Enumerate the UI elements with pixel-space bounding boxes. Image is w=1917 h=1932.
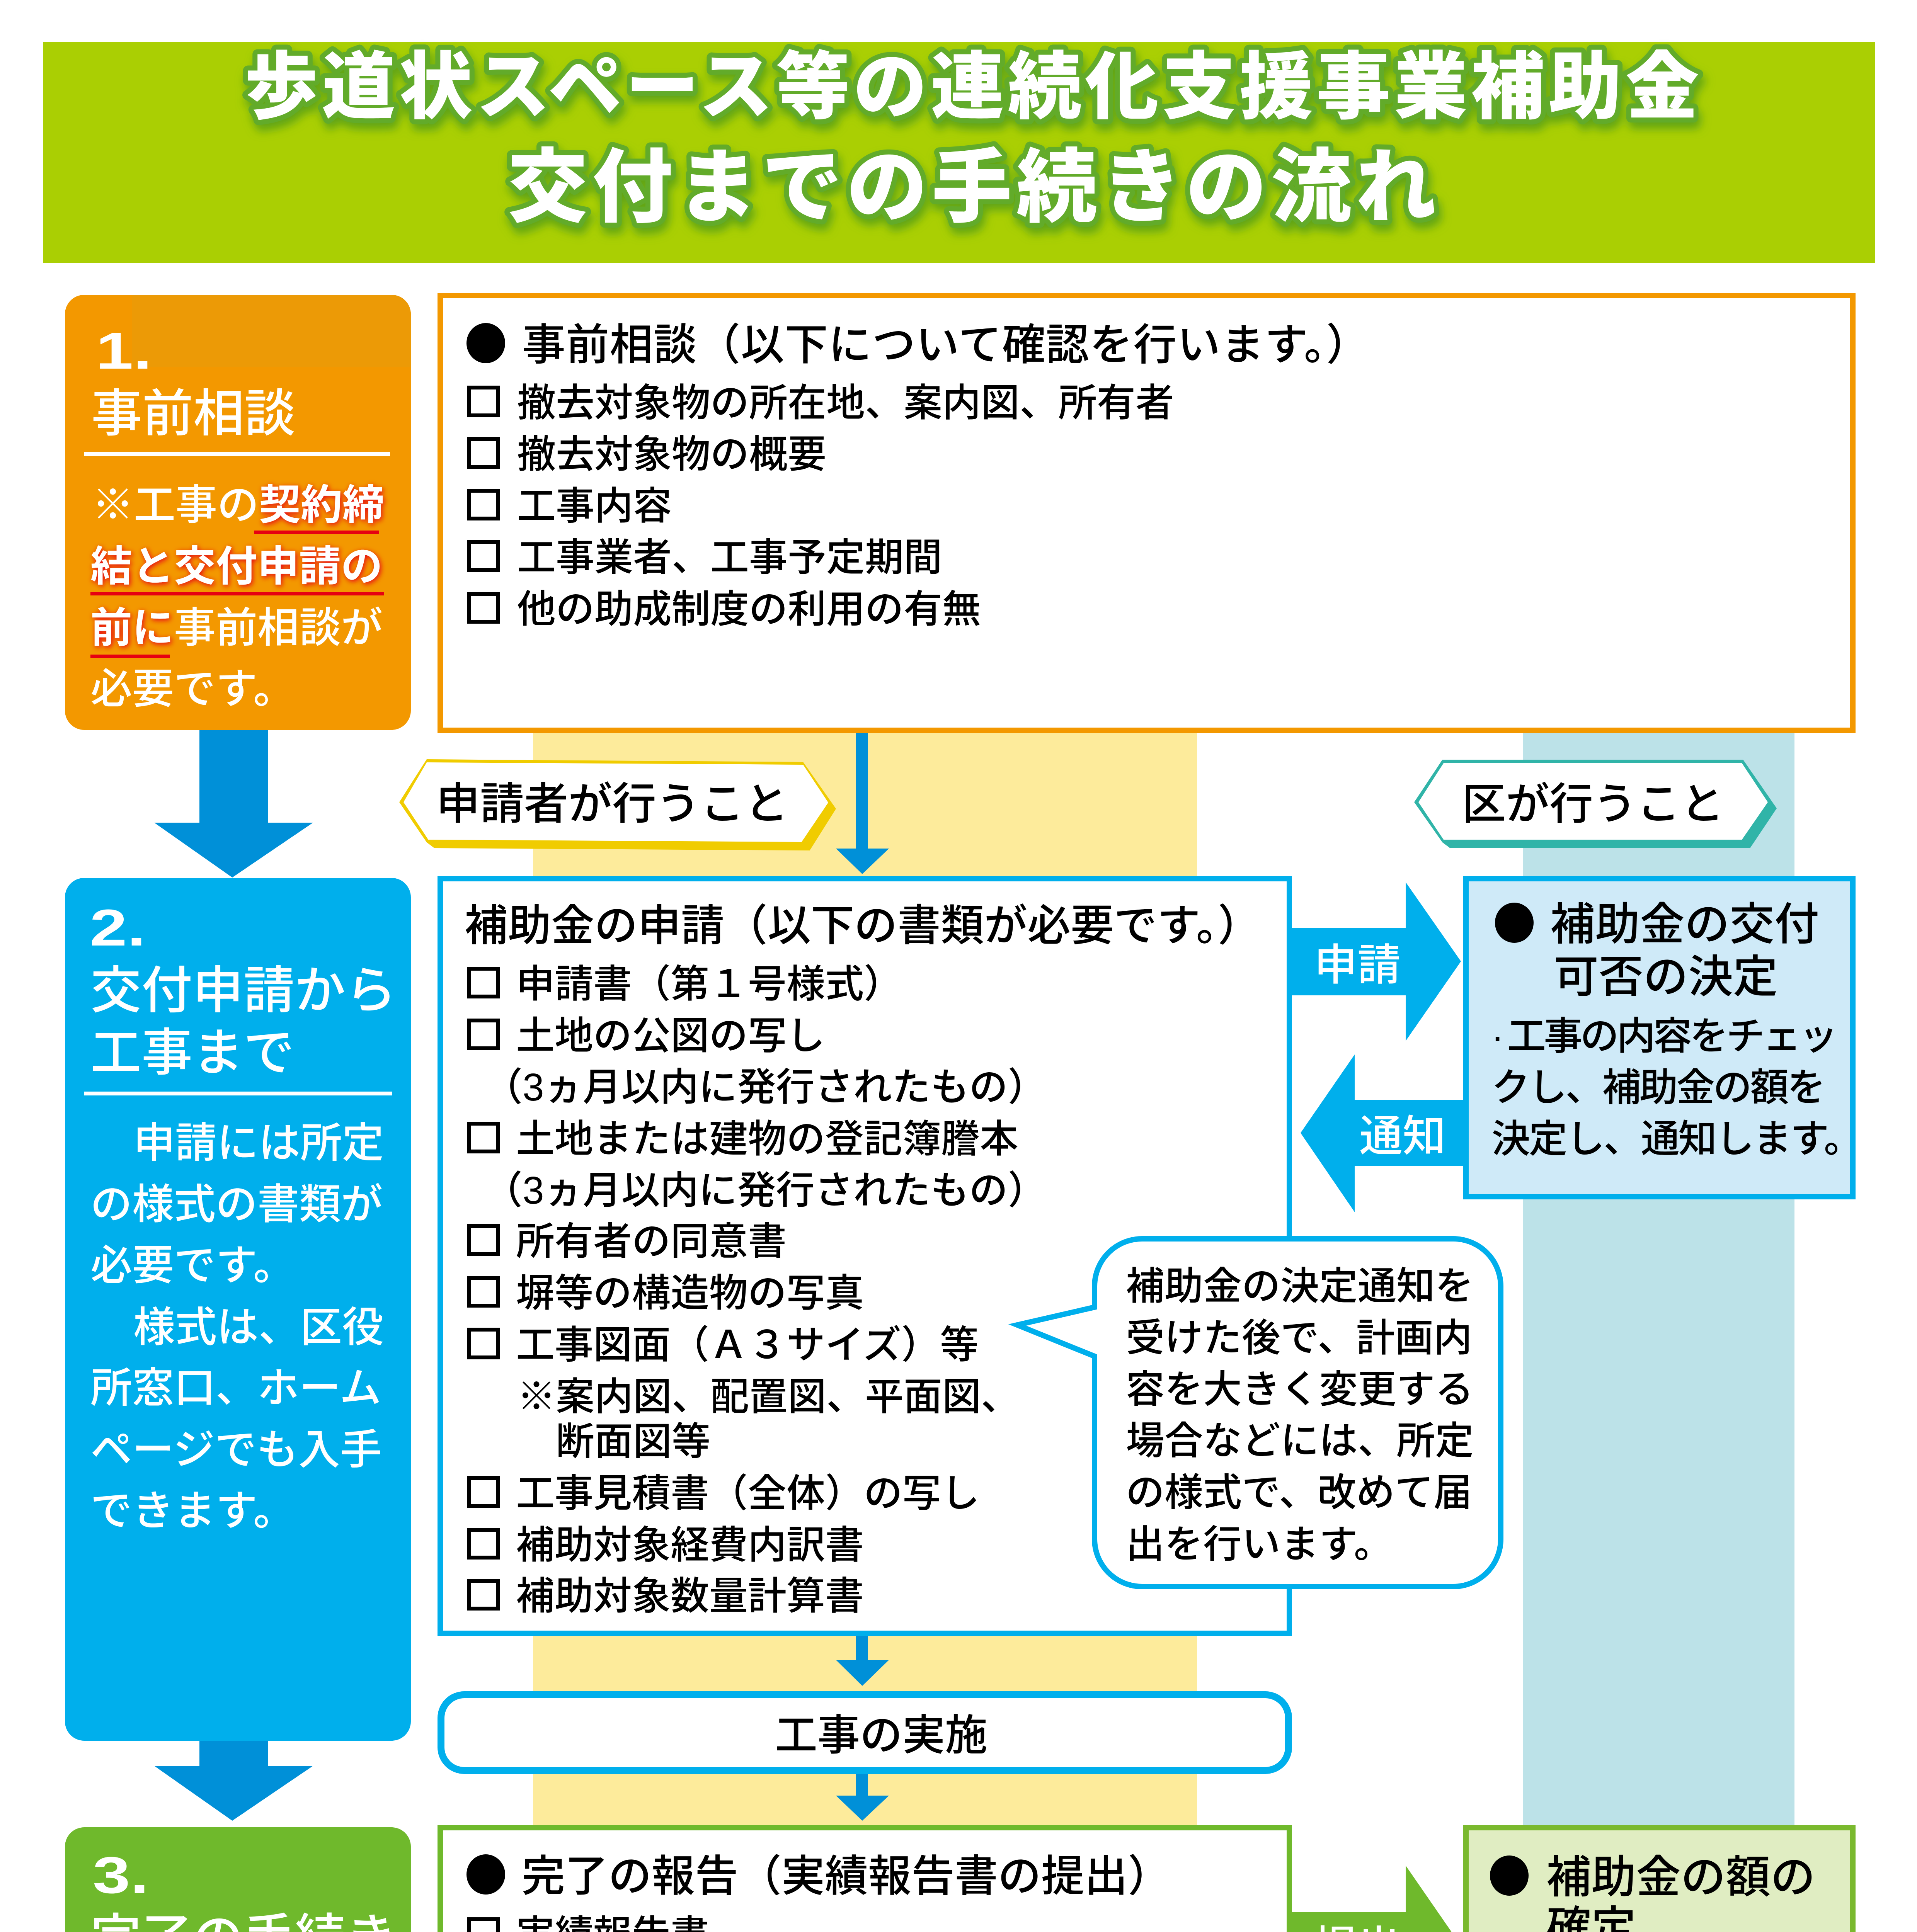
label: applicant tasks [399, 759, 836, 850]
checklist note: 断面図等 [556, 1420, 710, 1463]
checklist note: ※案内図、配置図、平面図、 [517, 1375, 1020, 1418]
checklist item: 補助対象経費内訳書 [516, 1524, 864, 1567]
arrow: report submit [1292, 1866, 1461, 1932]
callout: change notice: 容を大きく変更する [1126, 1368, 1474, 1411]
box: construction: 工事の実施 [775, 1712, 987, 1759]
decision body: · [1491, 1015, 1504, 1058]
box: construction [441, 1695, 1289, 1770]
title line 1: 歩道状スペース等の連続化支援事業補助金 [245, 46, 1699, 128]
step 2 heading: 交付申請から [90, 962, 397, 1019]
panel: step 2: 工事まで [90, 1024, 295, 1081]
checklist item: 他の助成制度の利用の有無 [517, 588, 981, 631]
step 1 note: 結と交付申請の [90, 543, 383, 590]
step 2 description: できます。 [90, 1487, 295, 1534]
arrow: notification: 通知 [1359, 1112, 1446, 1160]
callout: change notice: 受けた後で、計画内 [1126, 1316, 1472, 1360]
arrow: application to construction [836, 1636, 889, 1686]
report heading: 完了の報告（実績報告書の提出） [522, 1852, 1171, 1900]
checklist note: （3ヵ月以内に発行されたもの） [484, 1169, 1047, 1212]
panel: step 2 [65, 878, 411, 1741]
arrow: step 1 to 2 [154, 730, 313, 878]
label: applicant tasks: 申請者が行うこと [436, 780, 788, 829]
checklist item: 工事図面（Ａ３サイズ）等 [516, 1323, 979, 1367]
column band: applicant [533, 730, 1197, 1932]
column band: ward office [1523, 730, 1794, 1932]
checklist item: 補助対象数量計算書 [516, 1575, 864, 1618]
callout: change notice [1017, 1239, 1501, 1587]
panel: application documents [440, 879, 1289, 1633]
step 1 note: 契約締 [259, 481, 384, 528]
arrow: notification [1301, 1054, 1463, 1212]
title line 2: 交付までの手続きの流れ [507, 143, 1436, 233]
panel: step 3 [65, 1827, 411, 1932]
callout: change notice: の様式で、改めて届 [1126, 1471, 1472, 1514]
step 2 description: ページでも入手 [90, 1426, 382, 1473]
callout: change notice: 出を行います。 [1126, 1523, 1393, 1566]
arrow: application submit: 申請 [1314, 941, 1401, 989]
arrow: consultation to application [836, 733, 889, 874]
amount heading: 補助金の額の [1546, 1852, 1815, 1902]
step 2 description: 様式は、区役 [133, 1304, 384, 1350]
decision heading [1495, 899, 1819, 1002]
arrow: application submit [1292, 882, 1461, 1041]
decision body: クし、補助金の額を [1491, 1066, 1826, 1109]
application heading: 補助金の申請（以下の書類が必要です。） [465, 901, 1261, 950]
step 3 number: 3. [93, 1846, 149, 1904]
decision body: 決定し、通知します。 [1491, 1117, 1863, 1161]
arrow: step 2 to 3 [154, 1741, 313, 1821]
checklist item: 申請書（第１号様式） [516, 963, 902, 1006]
panel: grant decision [1466, 879, 1863, 1197]
checklist item: 塀等の構造物の写真 [516, 1272, 864, 1315]
panel: step 1 [65, 295, 411, 730]
step 2 description: 必要です。 [90, 1242, 295, 1289]
step 2 description [90, 1119, 384, 1534]
arrow: construction to report [836, 1774, 889, 1821]
step 1 number: 1. [96, 321, 152, 379]
bullet heading: 事前相談（以下について確認を行います。） [522, 321, 1370, 369]
decision heading: 可否の決定 [1554, 952, 1778, 1002]
amount heading [1490, 1852, 1815, 1932]
step 1 note [90, 481, 384, 712]
decision body [1491, 1015, 1863, 1161]
step 2 number: 2. [90, 898, 146, 956]
step 2 description: の様式の書類が [90, 1181, 383, 1228]
step 1 note: ※工事の [92, 481, 259, 528]
step 2 description: 申請には所定 [133, 1119, 384, 1166]
checklist item: 土地の公図の写し [516, 1014, 825, 1058]
panel: completion report [440, 1828, 1289, 1932]
panel: amount decision [1466, 1828, 1853, 1932]
step 1 note: 前に [90, 604, 174, 651]
step 1 heading: 事前相談 [91, 385, 295, 442]
checklist item: 工事業者、工事予定期間 [517, 536, 942, 579]
callout: change notice: 補助金の決定通知を [1126, 1265, 1474, 1308]
checklist note: （3ヵ月以内に発行されたもの） [484, 1066, 1047, 1109]
checklist item: 土地または建物の登記簿謄本 [516, 1117, 1018, 1161]
step 1 note: 事前相談が [174, 604, 383, 651]
checklist item: 撤去対象物の所在地、案内図、所有者 [517, 381, 1174, 425]
decision heading: 補助金の交付 [1550, 899, 1819, 949]
step 1 note: 必要です。 [90, 665, 295, 712]
label: ward tasks: 区が行うこと [1462, 780, 1724, 828]
panel: pre-consultation checklist [440, 296, 1853, 730]
title banner [43, 42, 1875, 263]
decision body: 工事の内容をチェッ [1507, 1015, 1838, 1058]
step 2 description: 所窓口、ホーム [90, 1364, 381, 1411]
label: ward tasks [1414, 760, 1777, 848]
callout: change notice: 場合などには、所定 [1126, 1419, 1474, 1463]
checklist item: 撤去対象物の概要 [517, 433, 826, 476]
checklist item: 工事内容 [517, 485, 672, 528]
checklist item: 所有者の同意書 [516, 1220, 787, 1263]
checklist item: 工事見積書（全体）の写し [516, 1472, 980, 1515]
